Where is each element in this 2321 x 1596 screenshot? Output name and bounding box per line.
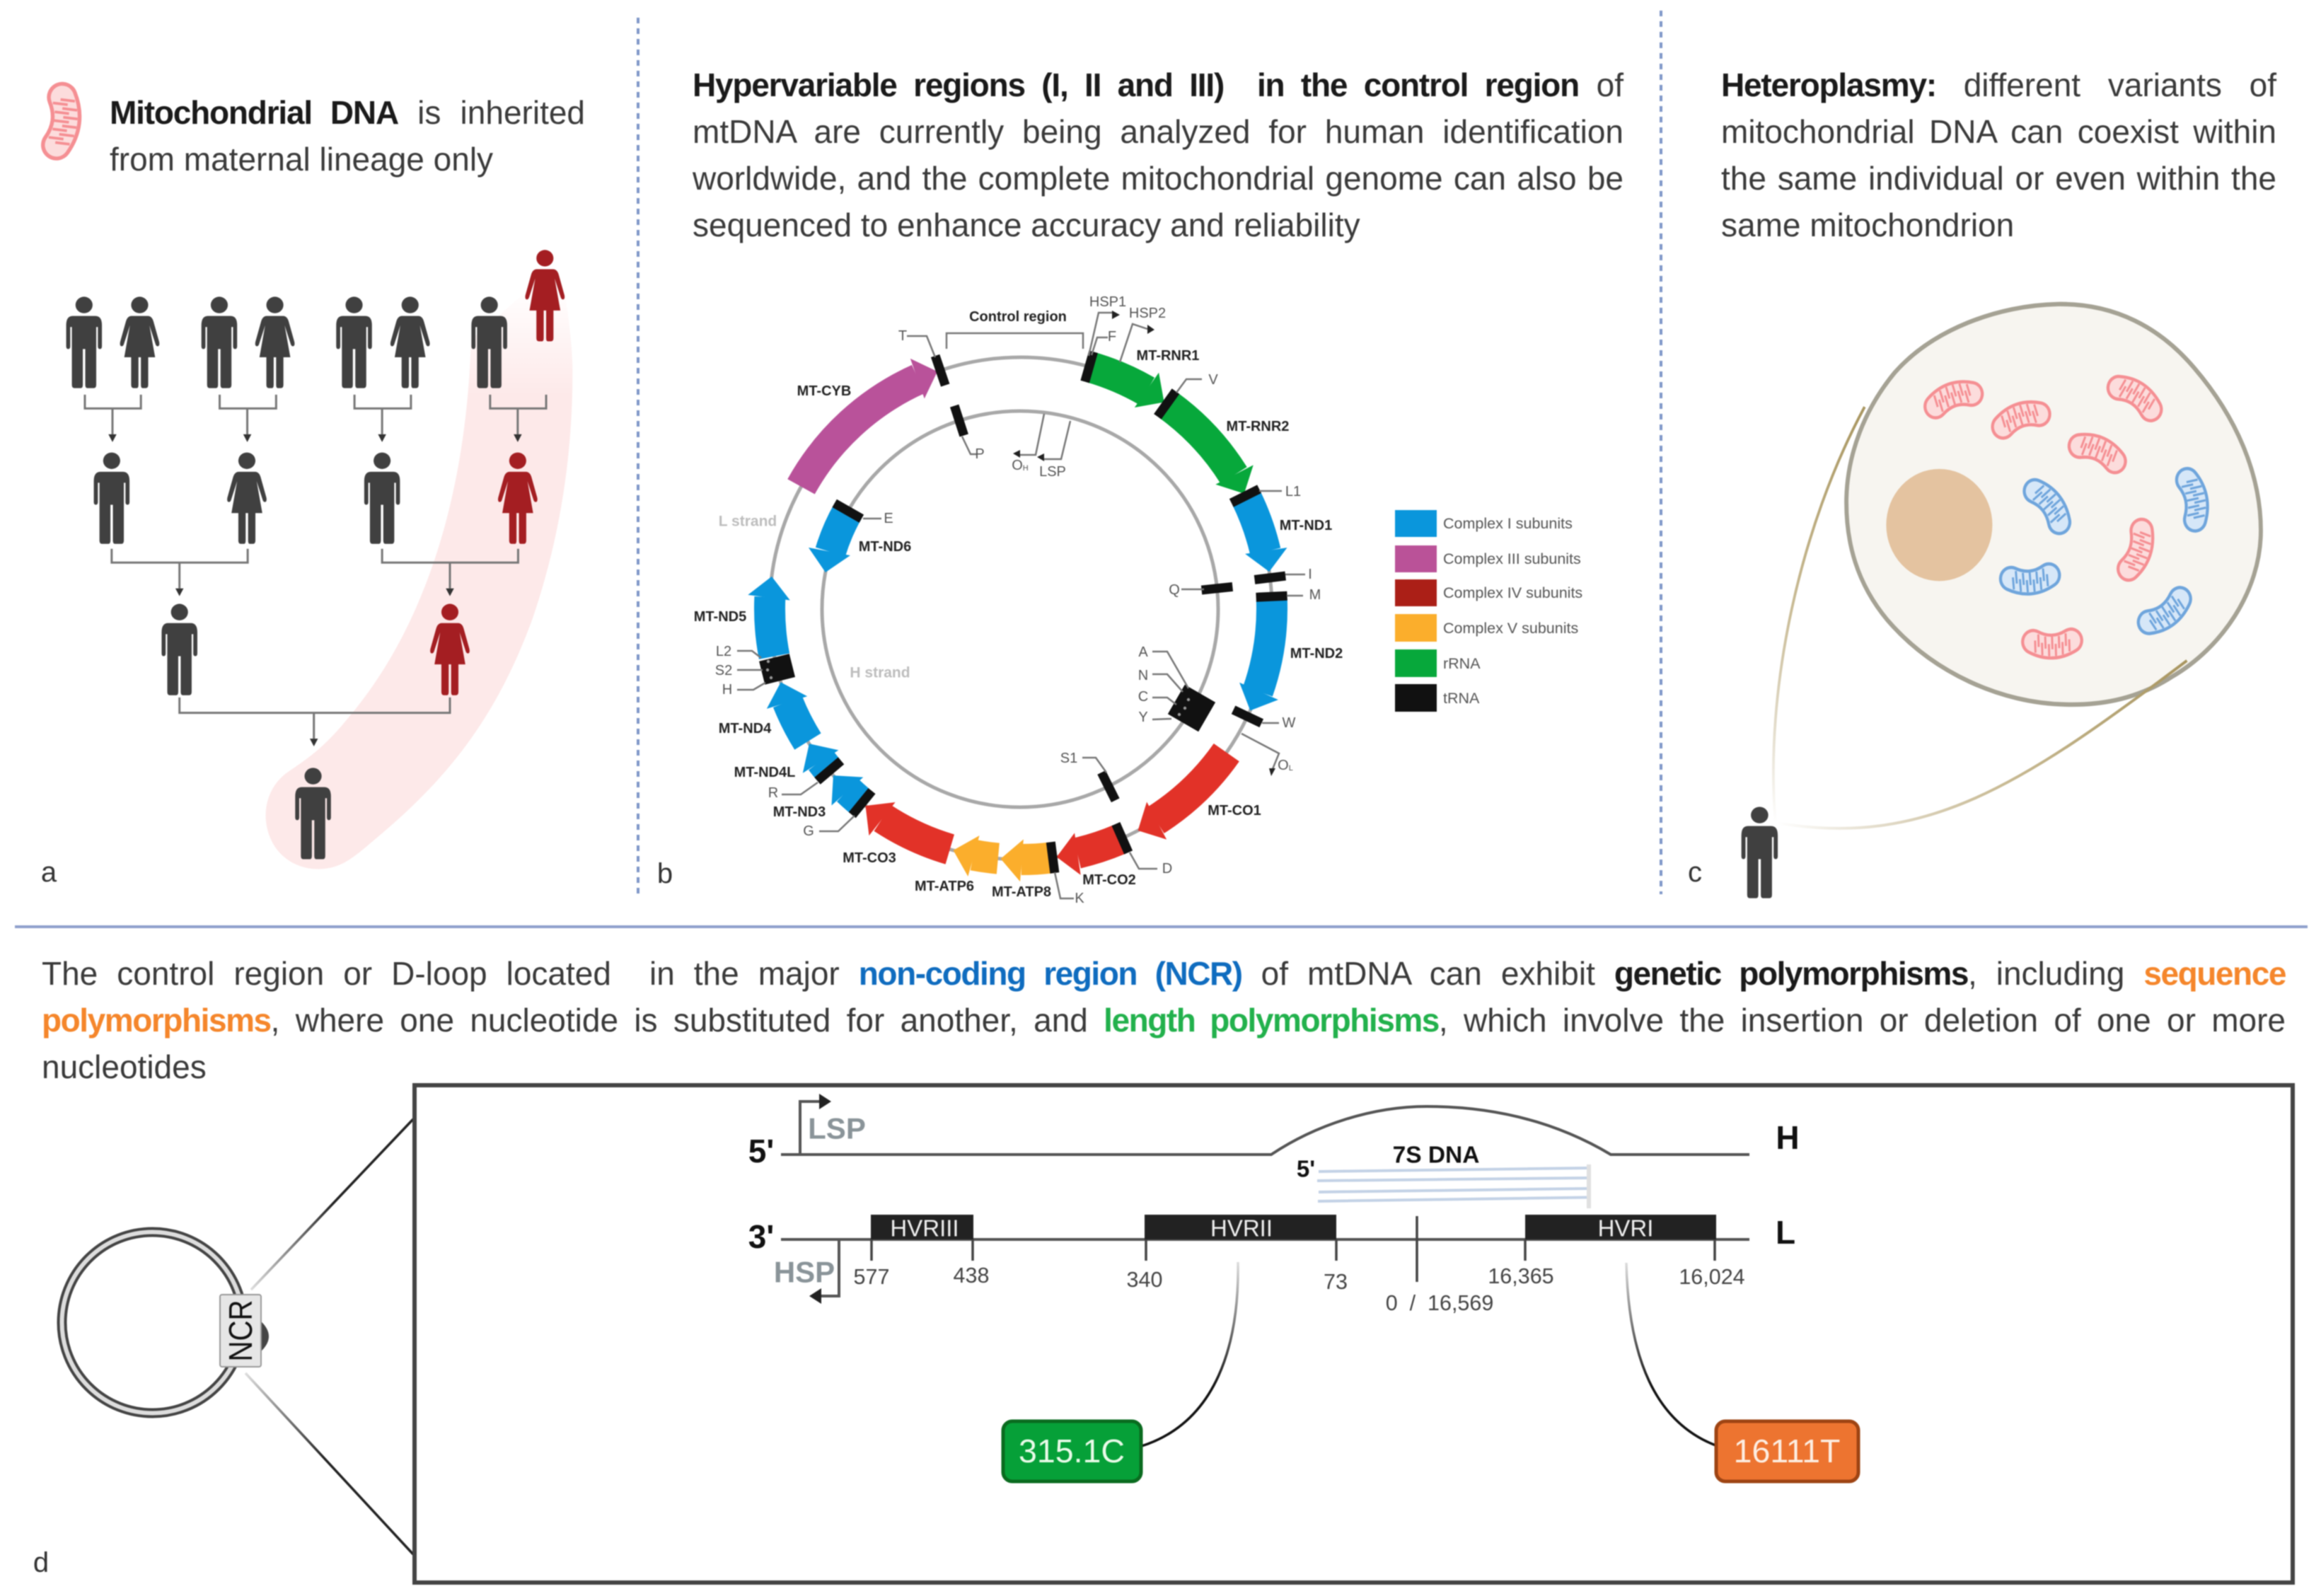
gene and site labels: M [1309,587,1321,603]
gene and site labels: L [1289,764,1293,773]
gene: MT-ND2 [761,349,1280,868]
LSP promoter [800,1094,866,1155]
generation 3 [161,604,470,695]
text block: panel b heading [692,66,1624,243]
text block: panel b heading: Hypervariable regions (I, II and III) in the control region of [693,66,1623,103]
leader lines [737,313,1305,898]
panel c: heteroplasmy cell [1742,304,2261,898]
gene and site labels: L strand [719,514,777,529]
text block: panel b heading: sequenced to enhance accuracy and reliability [693,207,1360,243]
gene: MT-ND4 [675,262,1367,954]
zoom cone lines [1773,407,2187,828]
gene and site labels: MT-ATP8 [992,884,1051,900]
control region bracket [947,333,1083,349]
icon: mitochondrion [48,96,80,147]
gene: MT-RNR2 [670,258,1372,959]
gene: MT-ND5 [727,314,1315,903]
gene and site labels: MT-ND1 [1280,518,1332,533]
legend: genome map: Complex I subunits [1443,515,1573,532]
gene and site labels: A [1138,644,1148,660]
HSP promoter: HSP [774,1255,835,1289]
connectors [85,395,546,746]
text block: panel d description: nucleotides [42,1048,207,1085]
panel b: mitochondrial genome map [667,255,1374,962]
gene and site labels: F [1108,329,1116,345]
position ticks and numbers: 0 / 16,569 [1386,1291,1493,1315]
gene and site labels: T [898,328,907,344]
label c: c [1688,857,1702,888]
text block: panel c heading [1720,66,2278,243]
panel a: maternal inheritance pedigree [66,250,572,869]
gene and site labels: MT-CO1 [1208,803,1261,819]
person [1742,806,1778,898]
gene and site labels: MT-ND4L [734,765,795,780]
gene and site labels: Q [1169,582,1180,598]
callout: 16111T [1626,1263,1858,1481]
panel dividers [15,11,2308,927]
mtDNA ring [62,1232,243,1413]
HSP promoter [774,1239,839,1304]
gene and site labels: H [722,682,732,698]
text block: panel c heading: Heteroplasmy: different variants of [1721,66,2276,103]
text block: panel d description: The control region or D-loop located in the major non-coding region (NCR) of mtDNA can exhibit genetic polymorphisms, including sequence [42,955,2286,992]
gene: MT-CO2 [692,279,1350,937]
D-loop bump [260,1320,269,1353]
gene: MT-CO1 [671,259,1370,958]
nucleus [1886,469,1992,581]
hypervariable region bars: HVRIII [890,1215,959,1241]
text block: panel a heading [109,94,585,178]
H strand with displacement loop [748,1106,1800,1169]
7S DNA: 7S DNA [1393,1142,1479,1169]
position ticks and numbers: 340 [1127,1268,1162,1292]
gene and site labels: W [1283,715,1296,731]
gene and site labels: MT-ATP6 [915,879,974,894]
gene and site labels: H [1023,464,1029,473]
cell body [1846,304,2261,705]
hypervariable region bars: HVRI [1598,1215,1653,1241]
inner ring [822,411,1218,807]
text block: panel b heading: mtDNA are currently being analyzed for human identification [693,113,1623,150]
gene: MT-CO3 [709,296,1333,920]
gene and site labels: L2 [716,644,731,659]
gene and site labels: G [803,823,814,839]
outer ring [770,357,1272,860]
gene and site labels: Y [1138,710,1148,725]
label b: b [657,858,673,889]
gene and site labels: H strand [850,665,910,681]
position ticks and numbers: 16,365 [1488,1264,1554,1288]
gene and site labels: MT-ND6 [859,539,911,555]
text block: panel b heading: worldwide, and the complete mitochondrial genome can also be [693,160,1623,197]
gene and site labels: Control region [969,309,1067,325]
text block: panel c heading: mitochondrial DNA can coexist within [1721,113,2276,150]
gene and site labels: O [1012,458,1023,473]
gene: MT-ND4L [667,255,1374,962]
legend: genome map: Complex III subunits [1443,550,1581,567]
gene and site labels: MT-CO2 [1082,872,1136,888]
position ticks and numbers: 16,024 [1679,1265,1745,1289]
gene and site labels [694,294,1343,906]
gene and site labels: E [884,511,893,526]
gene and site labels: I [1308,567,1312,582]
gene and site labels: C [1138,689,1148,705]
position ticks and numbers: 73 [1324,1270,1348,1294]
gene and site labels: P [975,446,985,462]
text block: panel c heading: same mitochondrion [1721,207,2014,243]
7S DNA: 5' [1297,1156,1315,1181]
hypervariable region bars [871,1215,1716,1241]
L strand: L [1776,1214,1795,1251]
L strand: 3' [748,1218,774,1255]
panel d: zoom box [415,1085,2293,1583]
tRNA bars [759,350,1287,874]
gene: MT-ATP6 [748,335,1294,881]
gene and site labels: HSP1 [1089,294,1126,310]
promoter arrow tips [1013,311,1275,776]
callout: 315.1C: 315.1C [1019,1433,1125,1469]
position ticks and numbers: 438 [954,1264,989,1288]
legend: genome map [1395,510,1582,712]
maternal lineage highlight band [266,290,572,869]
mitochondria variants [1931,375,2209,657]
gene: MT-CYB [679,267,1362,950]
LSP promoter: LSP [808,1112,866,1145]
text block: panel a heading: Mitochondrial DNA is inherited [110,94,585,131]
tRNA cluster dots [766,660,1190,716]
position ticks and numbers: 577 [854,1265,889,1289]
L strand [748,1214,1795,1255]
gene and site labels: MT-ND4 [719,721,772,736]
legend: genome map: rRNA [1443,655,1481,672]
gene: MT-ATP8 [741,328,1301,889]
gene and site labels: MT-RNR1 [1137,348,1199,364]
text block: panel a heading: from maternal lineage only [110,141,493,178]
text block: panel d description: polymorphisms, where one nucleotide is substituted for another, and length polymorphisms, which involve the insertion or deletion of one or more [42,1002,2286,1039]
gene and site labels: O [1278,758,1289,773]
legend: genome map: tRNA [1443,690,1480,707]
legend: genome map: Complex V subunits [1443,620,1578,637]
callout: 315.1C [1003,1262,1238,1481]
gene: MT-ND1 [685,272,1357,944]
panel d: mtDNA circle with NCR [62,1119,413,1554]
gene and site labels: LSP [1039,464,1066,480]
generation 4 [295,768,331,860]
gene and site labels: L1 [1285,484,1301,499]
gene: MT-ND6 [773,362,1267,856]
gene: MT-RNR1 [710,298,1331,919]
legend: genome map: Complex IV subunits [1443,584,1582,601]
gene and site labels: MT-ND5 [694,609,746,625]
callout: 16111T: 16111T [1734,1433,1840,1469]
cone lines [245,1119,413,1554]
7S DNA [1297,1142,1591,1208]
gene and site labels: MT-ND2 [1290,646,1343,661]
gene and site labels: R [768,785,778,801]
text block: panel d description [42,955,2286,1085]
NCR box: NCR [222,1300,259,1361]
gene and site labels: N [1138,668,1148,683]
hypervariable region bars: HVRII [1210,1215,1273,1241]
gene and site labels: HSP2 [1129,306,1166,321]
position ticks and numbers [854,1216,1745,1315]
gene and site labels: S2 [715,663,732,678]
text block: panel c heading: the same individual or even within the [1721,160,2276,197]
H strand with displacement loop: 5' [748,1133,774,1169]
gene and site labels: MT-CO3 [843,850,896,866]
gene: MT-ND3 [667,255,1374,962]
gene and site labels: S1 [1060,751,1077,766]
generation 1 [66,250,565,388]
H strand with displacement loop: H [1776,1119,1800,1156]
gene and site labels: D [1162,861,1172,877]
label d: d [33,1547,49,1578]
gene and site labels: K [1075,891,1084,906]
gene and site labels: MT-CYB [797,383,851,399]
gene and site labels: MT-ND3 [773,804,826,820]
generation 2 [94,453,538,544]
gene and site labels: V [1208,372,1218,388]
gene and site labels: MT-RNR2 [1227,419,1289,434]
label a: a [41,857,57,888]
